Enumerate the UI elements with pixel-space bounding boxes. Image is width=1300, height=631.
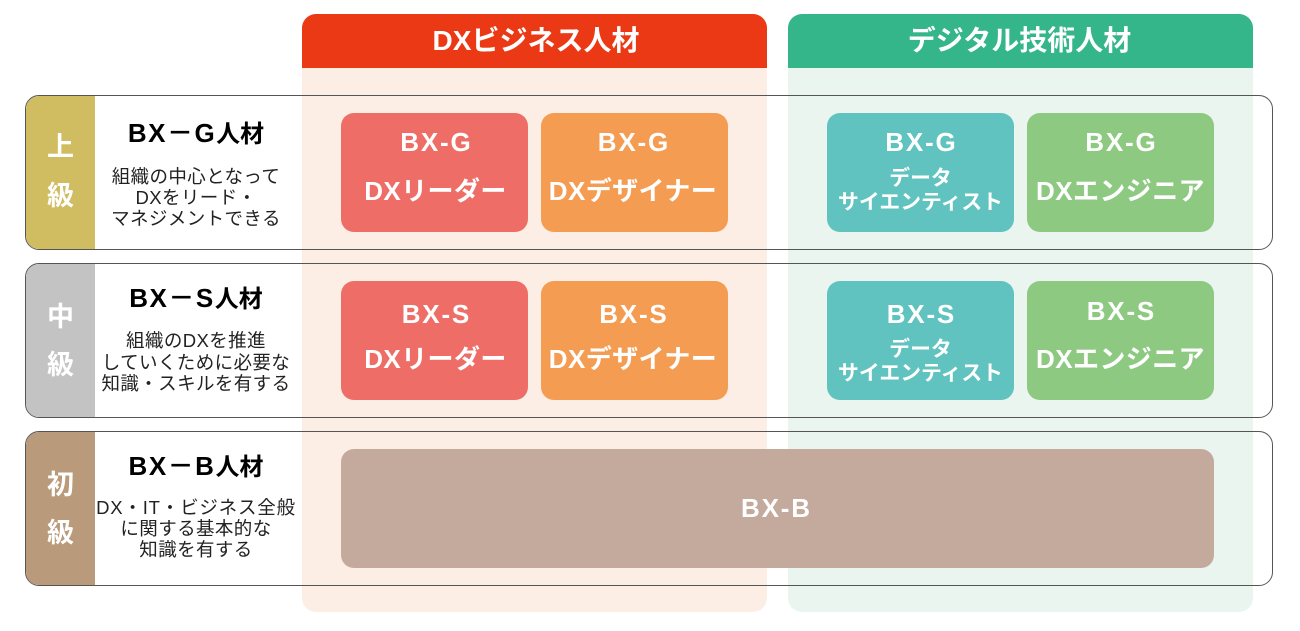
card: BX-S data scientist: データ	[889, 338, 952, 361]
card: BX-B spanning both columns	[341, 449, 1214, 568]
card: BX-G data scientist: BX-G	[885, 127, 958, 157]
card: BX-S DX designer: DXデザイナー	[549, 344, 717, 374]
heading: digital technology talent	[788, 14, 1253, 68]
card: BX-G DX leader	[341, 113, 528, 232]
card: BX-G DX engineer: DXエンジニア	[1036, 176, 1205, 206]
level label: upper	[26, 96, 95, 249]
text: BX-G description: マネジメントできる	[111, 208, 281, 228]
text: BX-B description: に関する基本的な	[120, 518, 272, 539]
text: BX-G description: DXをリード・	[136, 186, 256, 208]
text: BX-B description: 知識を有する	[139, 539, 253, 560]
level label: upper: 級	[47, 181, 74, 211]
text: BX-G description	[111, 166, 281, 228]
level label: upper: 上	[47, 132, 74, 162]
card: BX-S data scientist	[827, 281, 1014, 400]
text: BX-B description	[96, 497, 296, 560]
card: BX-G DX engineer	[1027, 113, 1214, 232]
heading: BX-S talent: BX－S人材	[129, 283, 263, 313]
card: BX-G DX designer: BX-G	[598, 127, 670, 157]
level label: middle: 級	[47, 350, 74, 380]
card: BX-S DX designer	[541, 281, 728, 400]
card: BX-G data scientist: データ	[889, 167, 952, 190]
panel: DX business column background	[302, 14, 767, 612]
card: BX-G DX leader: DXリーダー	[364, 176, 507, 206]
heading: DX business talent: DXビジネス人材	[433, 25, 639, 56]
level label: middle: 中	[47, 302, 74, 332]
card: BX-G DX leader: BX-G	[400, 127, 472, 157]
text: BX-S description: 知識・スキルを有する	[101, 373, 290, 394]
heading: BX-G talent: BX－G人材	[128, 118, 264, 148]
card: BX-G data scientist: サイエンティスト	[838, 190, 1003, 214]
card: BX-S DX leader	[341, 281, 528, 400]
card: BX-S DX leader: BX-S	[402, 299, 471, 329]
card: BX-B spanning both columns: BX-B	[741, 493, 812, 523]
level label: beginner	[26, 432, 95, 585]
card: BX-S DX engineer: DXエンジニア	[1036, 344, 1205, 374]
level label: beginner: 初	[47, 470, 74, 500]
text: BX-S description: していくために必要な	[102, 352, 290, 372]
card: BX-S DX engineer	[1027, 281, 1214, 400]
card: BX-S DX leader: DXリーダー	[364, 344, 507, 374]
panel: beginner level row	[25, 431, 1273, 586]
panel: middle level row	[25, 263, 1273, 418]
card: BX-S data scientist: サイエンティスト	[838, 362, 1003, 384]
heading: digital technology talent: デジタル技術人材	[908, 25, 1131, 56]
heading: BX-B talent: BX－B人材	[129, 451, 263, 481]
heading: DX business talent	[302, 14, 767, 68]
panel: digital technology column background	[788, 14, 1253, 612]
level label: middle	[26, 264, 95, 417]
card: BX-G data scientist	[827, 113, 1014, 232]
card: BX-S DX engineer: BX-S	[1087, 296, 1156, 326]
card: BX-S data scientist: BX-S	[887, 299, 956, 329]
card: BX-G DX designer	[541, 113, 728, 232]
panel: upper level row	[25, 95, 1273, 250]
card: BX-S DX designer: BX-S	[599, 299, 669, 329]
text: BX-B description: DX・IT・ビジネス全般	[96, 497, 296, 518]
card: BX-G DX engineer: BX-G	[1085, 127, 1158, 157]
text: BX-G description: 組織の中心となって	[112, 166, 280, 186]
card: BX-G DX designer: DXデザイナー	[549, 176, 717, 206]
text: BX-S description	[101, 330, 290, 394]
text: BX-S description: 組織のDXを推進	[126, 330, 266, 351]
level label: beginner: 級	[47, 518, 74, 548]
